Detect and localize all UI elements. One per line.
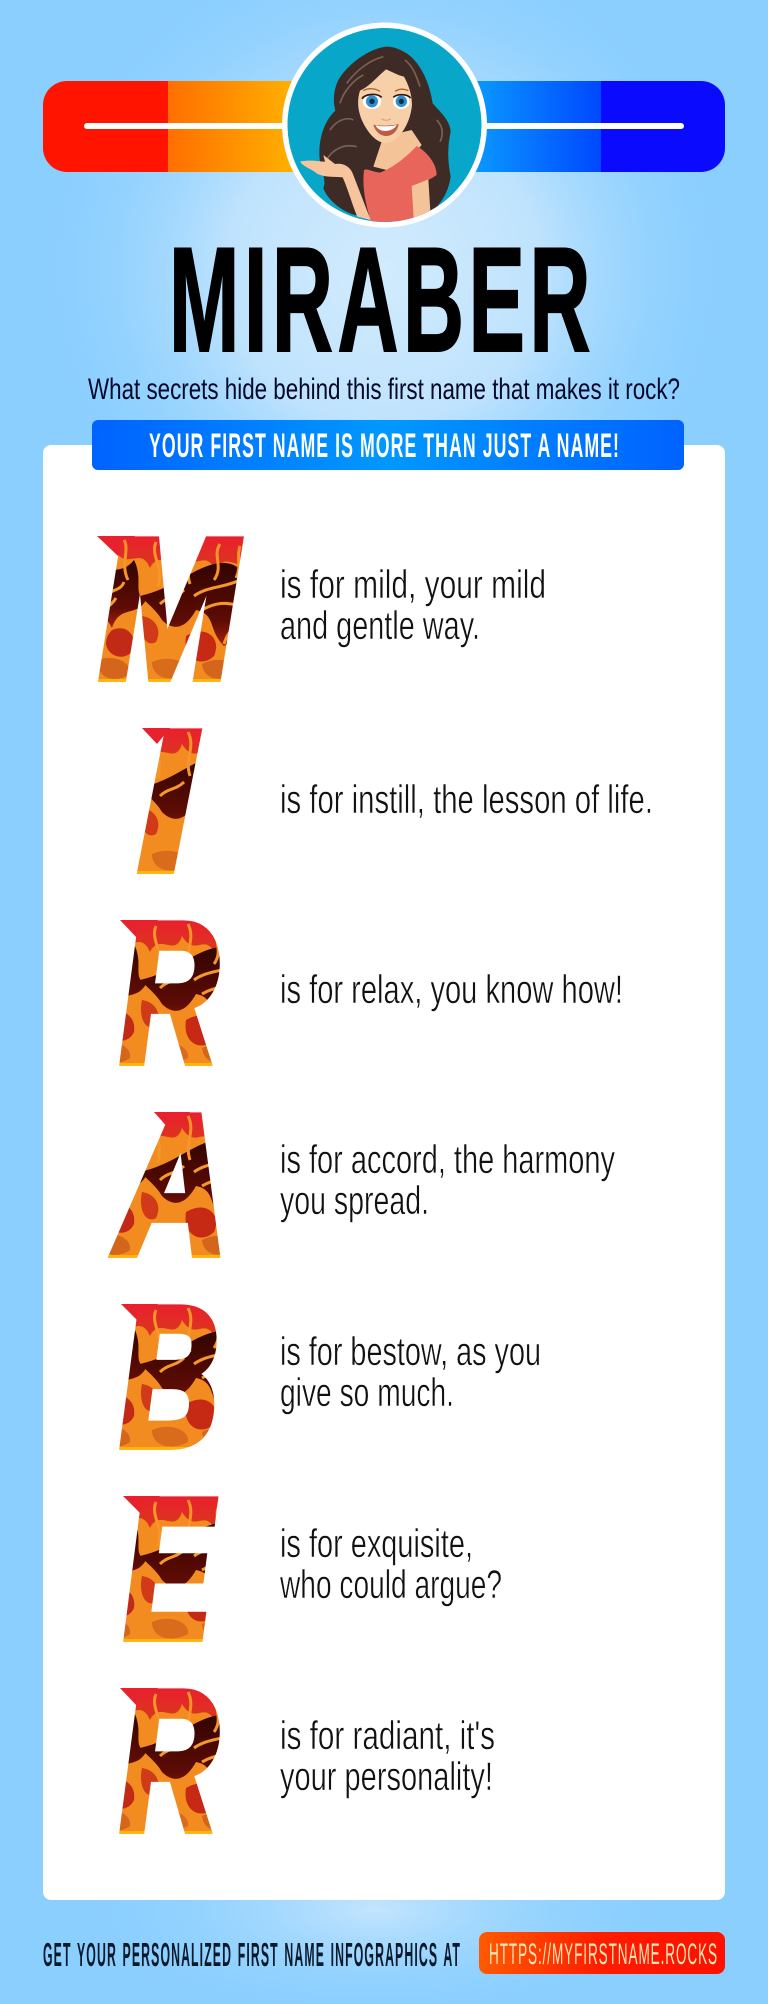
face (358, 69, 412, 143)
row: M (97, 498, 546, 721)
line: accord: is for accord, the harmony (280, 1138, 615, 1182)
flame letter M: M (99, 498, 241, 721)
row: B (120, 1266, 541, 1489)
line: mild (280, 563, 546, 648)
line: bestow (280, 1330, 541, 1415)
flame letter R (120, 882, 218, 1105)
neck (373, 130, 422, 170)
flame letter E: E (124, 1458, 216, 1681)
line: exquisite (279, 1522, 502, 1607)
flame letter B (120, 1266, 219, 1489)
flame letter R: R (120, 1650, 218, 1873)
reaching arm and hand (300, 155, 371, 220)
line: bestow: give so much. (280, 1371, 454, 1415)
smile (373, 124, 399, 136)
banner (92, 420, 684, 470)
eyes (362, 89, 411, 109)
flame letter E (123, 1458, 216, 1681)
line: mild: is for mild, your mild (280, 563, 546, 607)
white content panel (43, 445, 725, 1900)
row: R (120, 882, 623, 1105)
line: bestow: is for bestow, as you (280, 1330, 541, 1374)
sleeve arm (412, 180, 430, 218)
flame letter I: I (138, 690, 197, 913)
line: radiant (280, 1714, 495, 1799)
row: R second (120, 1650, 495, 1873)
avatar portrait (282, 22, 487, 228)
nose (382, 119, 391, 120)
flame letter A: A (112, 1074, 228, 1297)
row: I (138, 690, 653, 913)
hair (319, 47, 451, 215)
flame letter R: R (120, 882, 218, 1105)
hair highlights (327, 57, 442, 160)
row: A (112, 1074, 615, 1297)
flame letter B: B (120, 1266, 219, 1489)
line: accord (280, 1138, 615, 1223)
line: radiant: is for radiant, it's (280, 1714, 495, 1758)
line: relax: is for relax, you know how! (280, 968, 623, 1012)
flame letter R (120, 1650, 218, 1873)
line: exquisite: who could argue? (279, 1563, 502, 1607)
row: E (123, 1458, 502, 1681)
line: mild: and gentle way. (280, 604, 480, 648)
line: exquisite: is for exquisite, (280, 1522, 473, 1566)
line: accord: you spread. (280, 1179, 429, 1223)
footer url button (479, 1932, 725, 1974)
header colour bar (43, 81, 725, 172)
shirt (363, 146, 437, 225)
line: radiant: your personality! (280, 1755, 493, 1799)
